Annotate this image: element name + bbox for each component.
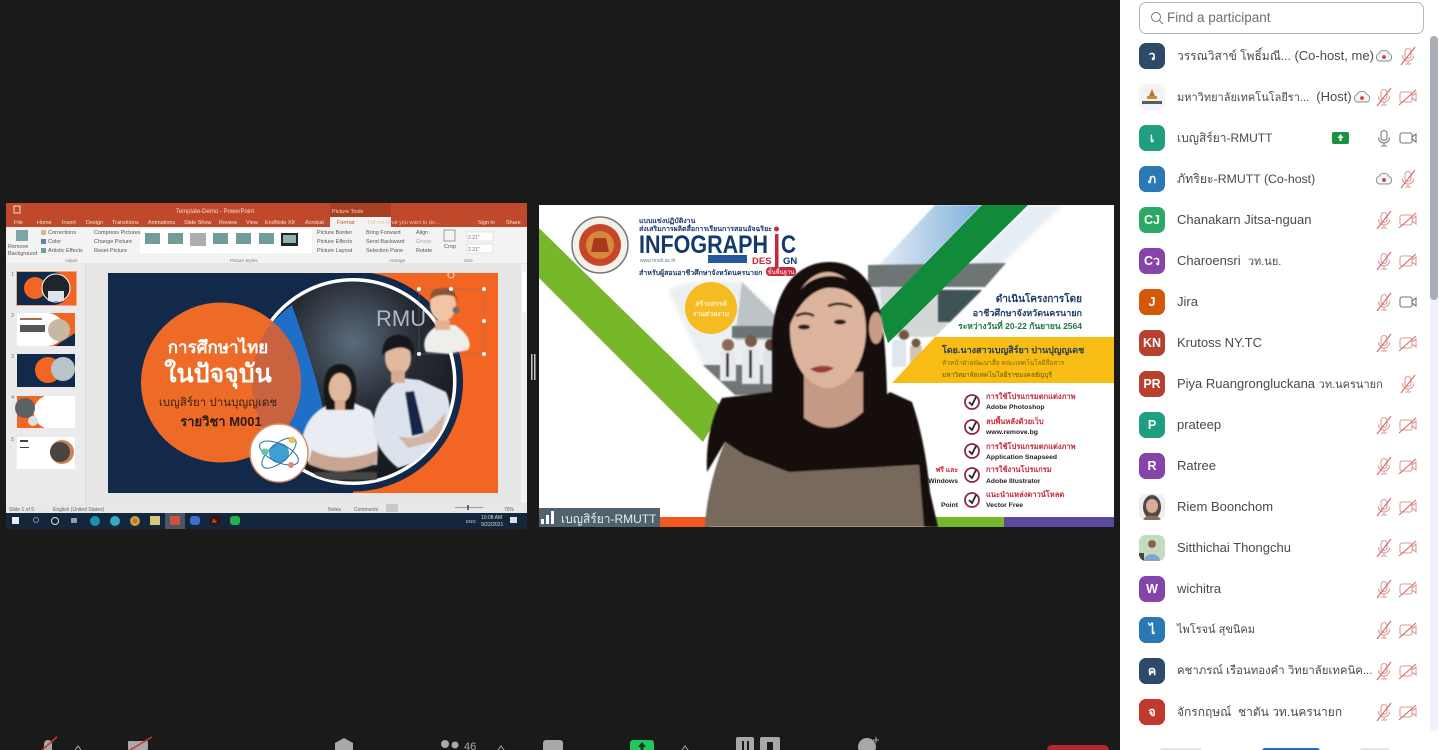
- participant row: [1139, 289, 1417, 315]
- checklist: แนะนำแหล่งดาวน์โหลด: [986, 489, 1064, 499]
- neck: [804, 372, 863, 428]
- slide thumbnails panel: [6, 263, 86, 503]
- PowerPoint ribbon: Picture Border: [317, 230, 352, 236]
- PowerPoint ribbon: Color: [48, 239, 61, 245]
- PowerPoint title bar: Share: [506, 220, 521, 226]
- participant row: [1139, 248, 1417, 274]
- dark green diagonal band: [878, 205, 1028, 343]
- participant row: วรรณวิสาข์ โพธิ์มณี... (Co-host, me): [1177, 48, 1374, 63]
- PowerPoint ribbon: Corrections: [48, 230, 76, 236]
- icon: chat: [543, 740, 563, 750]
- participant row: CJ: [1144, 213, 1160, 227]
- selected headset avatar: [424, 288, 470, 354]
- taupe dress: [705, 442, 924, 527]
- participant row: [1139, 125, 1417, 151]
- slide title text: การศึกษาไทย: [168, 337, 268, 357]
- status bar: Notes: [328, 507, 342, 513]
- panel: presenter video: [539, 205, 1114, 527]
- selection handles: [417, 287, 486, 356]
- project info text: ดำเนินโครงการโดย: [996, 292, 1082, 305]
- PowerPoint title bar: File: [14, 220, 23, 226]
- yellow badge: สร้างสรรค์: [695, 299, 727, 308]
- PowerPoint ribbon: Change Picture: [94, 239, 132, 245]
- PowerPoint title bar: Animations: [148, 220, 175, 226]
- face: [790, 272, 866, 388]
- participant row: [1139, 166, 1416, 192]
- participant row: จักรกฤษณ์ ชาตัน วท.นครนายก: [1177, 705, 1342, 719]
- Windows taskbar: 10:08 AM: [481, 515, 502, 521]
- participant row: ภัทริยะ-RMUTT (Co-host): [1177, 172, 1315, 186]
- checklist: ลบพื้นหลังด้วยเว็บ: [986, 415, 1044, 426]
- checklist: Application Snapseed: [986, 454, 1057, 461]
- participant row: [1139, 43, 1416, 69]
- checklist: Windows: [928, 478, 958, 485]
- PowerPoint ribbon: Artistic Effects: [48, 248, 83, 254]
- yellow banner: หัวหน้าฝ่ายพัฒนาสื่อ คณะเทคโนโลยีสื่อสาร: [942, 358, 1065, 367]
- atom badge: [250, 424, 308, 482]
- checklist: Vector Free: [986, 502, 1023, 509]
- participant row: Riem Boonchom: [1177, 499, 1273, 514]
- status bar: Slide 1 of 5: [9, 507, 34, 513]
- PowerPoint title bar: [6, 203, 527, 227]
- PowerPoint title bar: Picture Tools: [332, 209, 364, 215]
- presenter: [705, 262, 938, 527]
- course title: INFOGRAPH: [639, 231, 768, 259]
- participant row: [1139, 207, 1417, 233]
- PowerPoint title bar: Home: [37, 220, 52, 226]
- PowerPoint ribbon: Compress Pictures: [94, 230, 141, 236]
- icon: security: [335, 738, 353, 750]
- PowerPoint ribbon: Reset Picture: [94, 248, 127, 254]
- participant row: KN: [1143, 336, 1161, 350]
- checklist: การใช้โปรแกรมตกแต่งภาพ: [986, 391, 1076, 401]
- PowerPoint title bar: Acrobat: [305, 220, 324, 226]
- Windows taskbar: 9/22/2021: [481, 522, 503, 528]
- panel: participants list: [1120, 0, 1440, 750]
- participant row: Sitthichai Thongchu: [1177, 540, 1291, 555]
- icon: share screen: [630, 740, 688, 750]
- PowerPoint ribbon: Selection Pane: [366, 248, 403, 254]
- course title: แบบแข่งปฏิบัติงาน: [639, 217, 696, 225]
- black top: [707, 392, 938, 527]
- slide title text: เบญสิร์ยา ปานบุญญเดช: [159, 395, 277, 409]
- project info text: [958, 292, 1082, 331]
- participant row: Jira: [1177, 294, 1198, 309]
- participant row: [1139, 658, 1417, 684]
- participant row: Cว: [1144, 254, 1160, 268]
- search box: Find a participant: [1167, 10, 1271, 25]
- Windows taskbar: ENG: [466, 519, 476, 524]
- participant name tag: เบญสิร์ยา-RMUTT: [561, 512, 657, 526]
- Windows taskbar: Ai: [212, 519, 216, 525]
- participant row: [1139, 576, 1417, 602]
- participant row: ภ: [1148, 172, 1156, 186]
- icon: breakout rooms: [736, 737, 780, 750]
- Windows taskbar: [6, 513, 527, 529]
- participant row: ว: [1148, 49, 1156, 63]
- participant row: Krutoss NY.TC: [1177, 335, 1262, 350]
- PowerPoint title bar: Review: [219, 220, 237, 226]
- PowerPoint title bar: EndNote X9: [265, 220, 295, 226]
- participant row: [1139, 371, 1416, 397]
- PowerPoint ribbon: Remove: [8, 244, 28, 250]
- end button: [1047, 745, 1109, 750]
- orange circle: [141, 302, 301, 462]
- presentation scrollbar: [521, 264, 527, 503]
- yellow banner: โดย.นางสาวเบญสิร์ยา ปานปุญญเดช: [941, 344, 1084, 356]
- PowerPoint ribbon: Picture Styles: [230, 258, 258, 263]
- participant row: Piya Ruangrongluckana วท.นครนายก: [1177, 376, 1383, 391]
- participant row: [1139, 330, 1417, 356]
- PowerPoint ribbon: Size: [464, 258, 473, 263]
- participant row: [1139, 535, 1417, 561]
- participant row: เ: [1150, 131, 1154, 145]
- PowerPoint ribbon: Picture Layout: [317, 248, 353, 254]
- blue swirl: [273, 305, 323, 436]
- participant row: prateep: [1177, 417, 1221, 432]
- participant row: Chanakarn Jitsa-nguan: [1177, 212, 1311, 227]
- checklist: Point: [941, 502, 959, 509]
- yellow badge: [685, 282, 737, 334]
- course title: ขั้นพื้นฐาน: [767, 266, 795, 276]
- participant row: PR: [1143, 377, 1161, 391]
- panel: PowerPoint screen share: [6, 203, 527, 529]
- participant row: [1139, 617, 1417, 643]
- PowerPoint title bar: Insert: [62, 220, 76, 226]
- PowerPoint title bar: Format: [337, 220, 355, 226]
- icon: video off: [128, 737, 152, 750]
- slide title text: ในปัจจุบัน: [164, 358, 272, 390]
- project info text: ระหว่างวันที่ 20-22 กันยายน 2564: [958, 319, 1082, 331]
- bottom toolbar: [42, 737, 1109, 750]
- sky and building strip: [868, 205, 1063, 367]
- seal logo: [572, 217, 628, 273]
- PowerPoint title bar: Design: [86, 220, 103, 226]
- checklist: Adobe Illustrator: [986, 478, 1041, 485]
- main meeting area: [6, 203, 1114, 750]
- course title: ส่งเสริมการผลิตสื่อการเรียนการสอนอัจฉริยะ: [639, 223, 772, 233]
- participant row: เบญสิร์ยา-RMUTT: [1177, 131, 1272, 145]
- PowerPoint title bar: Sign in: [478, 220, 495, 226]
- PowerPoint ribbon: Crop: [444, 244, 456, 250]
- yellow banner: [892, 337, 1114, 383]
- PowerPoint ribbon: Picture Effects: [317, 239, 353, 245]
- course title: [639, 217, 797, 278]
- icon: reactions: [858, 737, 879, 750]
- participant row: [1139, 84, 1417, 110]
- participant row: ไพโรจน์ สุขนิคม: [1177, 624, 1255, 636]
- PowerPoint ribbon: Group: [416, 239, 431, 245]
- PowerPoint title bar: Template-Demo - PowerPoint: [176, 209, 255, 215]
- participant row: [1139, 494, 1417, 520]
- slide title text: [159, 337, 277, 429]
- slide thumbnails panel: 3: [11, 354, 14, 360]
- photo strip with students: [669, 280, 776, 396]
- participant row: ค: [1148, 664, 1156, 678]
- yellow banner: มหาวิทยาลัยเทคโนโลยีราชมงคลธัญบุรี: [942, 371, 1052, 379]
- PowerPoint ribbon: Adjust: [65, 258, 78, 263]
- PowerPoint ribbon: Send Backward: [366, 239, 405, 245]
- PowerPoint ribbon: Rotate: [416, 248, 432, 254]
- student: man: [373, 335, 450, 468]
- course title: C: [781, 231, 796, 259]
- hair: [772, 262, 887, 472]
- status bar: 76%: [504, 507, 515, 513]
- RMU wall text: RMU: [376, 306, 426, 331]
- PowerPoint ribbon: 2.21": [468, 247, 480, 253]
- PowerPoint ribbon: Bring Forward: [366, 230, 401, 236]
- slide thumbnails panel: 1: [11, 272, 14, 278]
- participant row: [1139, 453, 1417, 479]
- checklist: Adobe Photoshop: [986, 404, 1045, 411]
- PowerPoint title bar: View: [246, 220, 258, 226]
- student: woman: [302, 364, 378, 480]
- status bar: [6, 503, 527, 513]
- divider handle: [531, 354, 536, 380]
- color strip: [660, 517, 1114, 527]
- PowerPoint title bar: Transitions: [112, 220, 139, 226]
- participant name tag: [539, 508, 660, 527]
- PowerPoint title bar: Slide Show: [184, 220, 212, 226]
- participant row: Charoensri วท.นย.: [1177, 253, 1281, 268]
- checklist: การใช้งานโปรแกรม: [986, 464, 1052, 474]
- participant row: [1139, 699, 1417, 725]
- participant row: Ratree: [1177, 458, 1216, 473]
- PowerPoint ribbon: [6, 227, 527, 263]
- participant row: จ: [1148, 705, 1156, 719]
- footer buttons: [1160, 748, 1390, 750]
- checklist: www.remove.bg: [985, 429, 1038, 436]
- course title: DES: [752, 256, 772, 267]
- slide canvas: [108, 272, 498, 493]
- icon: participants: [441, 740, 504, 750]
- participant row: [1139, 412, 1417, 438]
- course title: GN: [783, 256, 797, 267]
- participant row: P: [1148, 418, 1156, 432]
- search box: [1139, 2, 1424, 34]
- participant row: ไ: [1149, 623, 1155, 637]
- participant row: มหาวิทยาลัยเทคโนโลยีรา... (Host): [1177, 89, 1352, 104]
- PowerPoint ribbon: 2.21": [468, 235, 480, 241]
- slide thumbnails panel: 4: [11, 395, 14, 401]
- orange circle over photo: [252, 321, 301, 428]
- yellow badge: งานสวยงาม: [693, 311, 730, 318]
- checklist: การใช้โปรแกรมตกแต่งภาพ: [986, 441, 1076, 451]
- PowerPoint title bar: Tell me what you want to do...: [367, 220, 440, 226]
- status bar: English (United States): [53, 507, 104, 513]
- PowerPoint ribbon: Align: [416, 230, 428, 236]
- participant row: R: [1147, 459, 1157, 473]
- icon: mute: [42, 737, 81, 750]
- project info text: อาชีวศึกษาจังหวัดนครนายก: [973, 308, 1082, 318]
- scrollbar: [1430, 36, 1438, 731]
- slide title text: รายวิชา M001: [180, 414, 262, 429]
- course title: สำหรับผู้สอนอาชีวศึกษาจังหวัดนครนายก: [639, 268, 762, 278]
- slide thumbnails panel: 5: [11, 437, 14, 443]
- checklist: ฟรี และ: [935, 466, 958, 474]
- participant row: คชาภรณ์ เรือนทองคำ วิทยาลัยเทคนิค...: [1177, 665, 1372, 677]
- participant row: W: [1146, 582, 1158, 596]
- checklist: [928, 391, 1076, 509]
- participant row: J: [1149, 295, 1155, 309]
- slide thumbnails panel: 2: [11, 313, 14, 319]
- PowerPoint ribbon: Background: [8, 251, 37, 257]
- green diagonal band: [539, 228, 723, 442]
- ear: [869, 312, 883, 344]
- course title: www.rmutt.ac.th: [640, 258, 676, 264]
- status bar: Comments: [354, 507, 379, 513]
- PowerPoint ribbon: Arrange: [389, 258, 406, 263]
- participant row: wichitra: [1177, 581, 1221, 596]
